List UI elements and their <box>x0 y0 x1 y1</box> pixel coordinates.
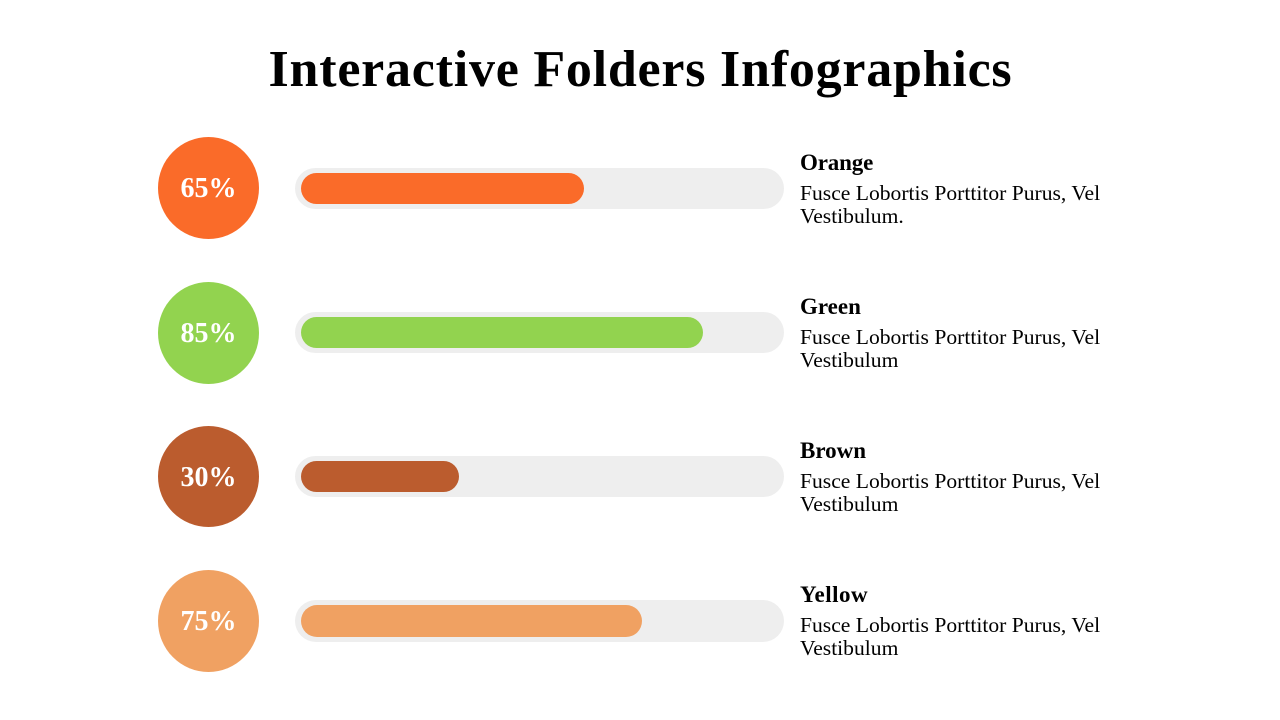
yellow heading: Yellow <box>800 582 868 607</box>
green percentage circle: 85% <box>180 318 236 349</box>
row: green <box>158 282 1100 384</box>
green description <box>800 325 1100 372</box>
brown description: Fusce Lobortis Porttitor Purus, Vel <box>800 469 1100 493</box>
orange progress bar <box>295 168 784 209</box>
orange description: Vestibulum. <box>800 204 904 228</box>
orange heading: Orange <box>800 150 873 175</box>
green description: Fusce Lobortis Porttitor Purus, Vel <box>800 325 1100 349</box>
green heading: Green <box>800 294 861 319</box>
yellow percentage circle: 75% <box>180 606 236 637</box>
green percentage circle <box>158 282 259 384</box>
brown percentage circle <box>158 426 259 527</box>
orange description: Fusce Lobortis Porttitor Purus, Vel <box>800 181 1100 205</box>
green description: Vestibulum <box>800 348 898 372</box>
green progress bar <box>295 312 784 353</box>
brown description <box>800 469 1100 516</box>
yellow description: Fusce Lobortis Porttitor Purus, Vel <box>800 613 1100 637</box>
yellow description: Vestibulum <box>800 636 898 660</box>
brown description: Vestibulum <box>800 492 898 516</box>
brown heading: Brown <box>800 438 866 463</box>
yellow description <box>800 613 1100 660</box>
yellow progress bar <box>295 600 784 642</box>
brown progress bar <box>295 456 784 497</box>
row: brown <box>158 426 1100 527</box>
orange percentage circle: 65% <box>180 173 236 204</box>
brown percentage circle: 30% <box>180 462 236 493</box>
row: orange <box>158 137 1100 239</box>
title: Interactive Folders Infographics <box>269 41 1012 98</box>
yellow percentage circle <box>158 570 259 672</box>
orange description <box>800 181 1100 228</box>
orange percentage circle <box>158 137 259 239</box>
row: yellow <box>158 570 1100 672</box>
